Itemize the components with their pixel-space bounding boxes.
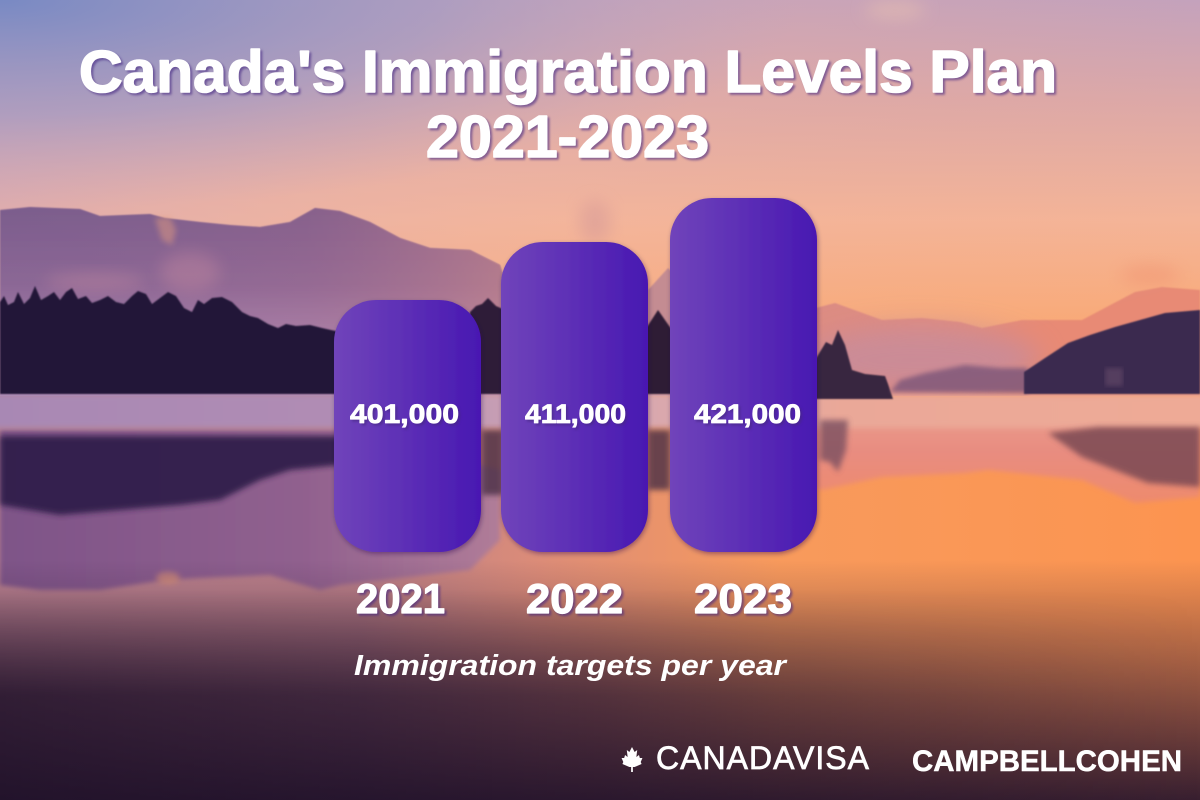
background: fog on the waterline <box>0 394 1200 428</box>
title: 2021-2023 <box>426 104 709 170</box>
bar: 2023 <box>670 198 817 622</box>
logo: CampbellCohen: CAMPBELLCOHEN <box>912 745 1182 778</box>
title: Canada's Immigration Levels Plan <box>79 39 1057 105</box>
bar: 2022 <box>501 242 648 622</box>
bar chart: immigration targets <box>334 198 817 622</box>
bar: 2023: 421,000 <box>694 399 801 429</box>
background: water <box>0 396 1200 800</box>
background: mountains <box>0 207 1200 400</box>
background: tree line and island <box>0 286 1200 399</box>
bar: 2021: 401,000 <box>350 399 459 429</box>
logo: CanadaVisa: CANADAVISA <box>656 740 870 776</box>
bar: 2022: 411,000 <box>525 399 626 429</box>
background: sky <box>0 0 1200 400</box>
bar: 2022: 2022 <box>526 575 623 622</box>
bar: 2021 <box>334 300 481 622</box>
title <box>79 39 1057 170</box>
icon: maple leaf <box>622 747 642 772</box>
bar: 2023: 2023 <box>694 575 792 622</box>
background: dark foreground vignette <box>0 560 1200 800</box>
bar: 2021: 2021 <box>356 575 445 622</box>
background: water reflections <box>0 420 1200 515</box>
caption: Immigration targets per year <box>354 650 788 682</box>
